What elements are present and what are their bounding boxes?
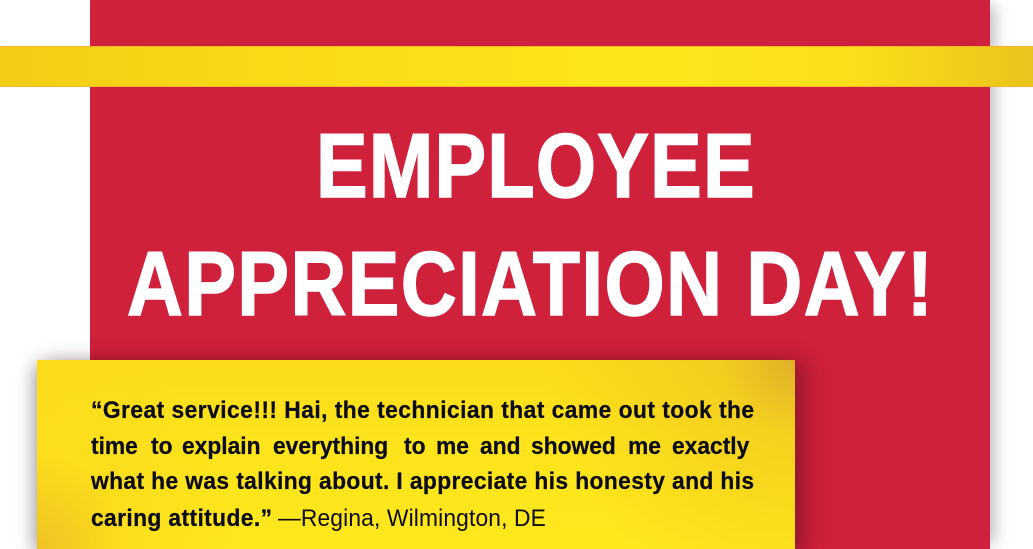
testimonial text: “Great service!!! Hai, the technician that came out took the [91, 396, 754, 423]
testimonial text: caring attitude.” [91, 504, 272, 531]
testimonial text: exactly [672, 432, 749, 459]
banner: yellow ribbon [0, 46, 1033, 87]
testimonial text: time [91, 432, 138, 459]
testimonial text: and [480, 432, 521, 459]
testimonial text: —Regina, Wilmington, DE [278, 504, 546, 531]
title: EMPLOYEE [316, 115, 755, 216]
testimonial text: to [404, 432, 426, 459]
testimonial text: me [628, 432, 661, 459]
testimonial text: me [436, 432, 469, 459]
panel: testimonial quote card [37, 360, 795, 549]
testimonial text: explain [182, 432, 261, 459]
title: APPRECIATION DAY! [127, 233, 933, 334]
testimonial text: everything [273, 432, 388, 459]
testimonial text: what he was talking about. I appreciate his honesty and his [90, 467, 754, 494]
testimonial text: to [151, 432, 173, 459]
testimonial text: showed [531, 432, 616, 459]
title [127, 115, 933, 334]
